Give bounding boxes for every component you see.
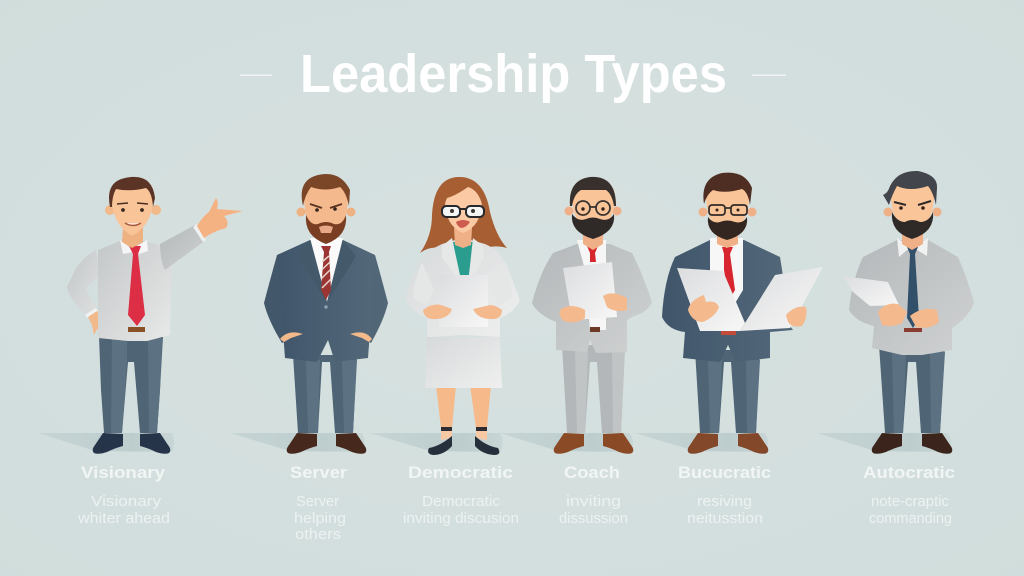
legs [436, 385, 491, 428]
head [884, 208, 892, 216]
left arm and hand [67, 250, 100, 316]
trousers [695, 350, 760, 433]
label: Server: helping [294, 510, 346, 527]
shirt [98, 241, 172, 341]
figure: Bureaucratic [635, 173, 823, 454]
label: Coach: Coach [564, 463, 620, 482]
head [698, 208, 708, 216]
document [843, 276, 899, 306]
label: Visionary: Visionary [81, 463, 166, 482]
label: Democratic: Democratic [422, 493, 501, 510]
jacket [532, 244, 652, 353]
trousers [562, 345, 625, 433]
hands [280, 332, 303, 342]
dark tie [907, 247, 919, 328]
label: Autocratic [863, 463, 955, 527]
label: Bucucratic [678, 463, 771, 527]
figure: Server [230, 174, 388, 454]
trousers [99, 336, 163, 433]
head [122, 228, 143, 248]
label: Autocratic: note-craptic [871, 493, 949, 510]
label: Coach: dissussion [559, 510, 628, 527]
label: Coach: inviting [566, 493, 621, 510]
open documents [677, 268, 745, 331]
label: Server: others [295, 526, 341, 543]
label: Bucucratic: resiving [697, 493, 752, 510]
shirt [310, 238, 343, 302]
label: Visionary: whiter ahead [77, 510, 170, 527]
hands [878, 304, 939, 328]
figure: Autocratic [817, 171, 974, 454]
label: Autocratic: Autocratic [863, 463, 955, 482]
jacket [405, 240, 520, 337]
label: Bucucratic: Bucucratic [678, 463, 771, 482]
label: Server: Server [290, 463, 347, 482]
figure: Coach [500, 177, 652, 454]
label: Democratic: inviting discusion [403, 510, 519, 527]
head [564, 206, 574, 216]
figure: Democratic [370, 177, 520, 455]
trousers [879, 345, 945, 433]
shirt [849, 240, 974, 355]
head [296, 208, 306, 216]
figure: Visionary [38, 177, 243, 454]
label: Visionary [77, 463, 170, 527]
label: Visionary: Visionary [91, 493, 162, 510]
jacket [277, 240, 375, 362]
label: Server: Server [296, 493, 339, 510]
label: Coach [559, 463, 628, 527]
document [563, 262, 617, 320]
suit [662, 240, 793, 362]
label: Autocratic: commanding [869, 510, 952, 527]
document [439, 275, 488, 327]
suit arms [264, 255, 296, 343]
trousers [293, 355, 357, 433]
tie and belt [128, 246, 145, 326]
label: Democratic: Democratic [408, 463, 513, 482]
hands [688, 295, 806, 326]
label: Server [290, 463, 347, 543]
head [454, 228, 472, 248]
shoes [428, 436, 499, 455]
pointing arm [160, 225, 206, 270]
label: Bucucratic: neitusstion [687, 510, 763, 527]
label: Democratic [403, 463, 519, 527]
shirt and tie [577, 240, 606, 330]
striped tie [321, 246, 331, 300]
hair behind [420, 177, 507, 253]
hands [423, 305, 502, 319]
title: Leadership Types [300, 44, 727, 104]
hands [560, 293, 627, 322]
skirt [425, 337, 502, 388]
